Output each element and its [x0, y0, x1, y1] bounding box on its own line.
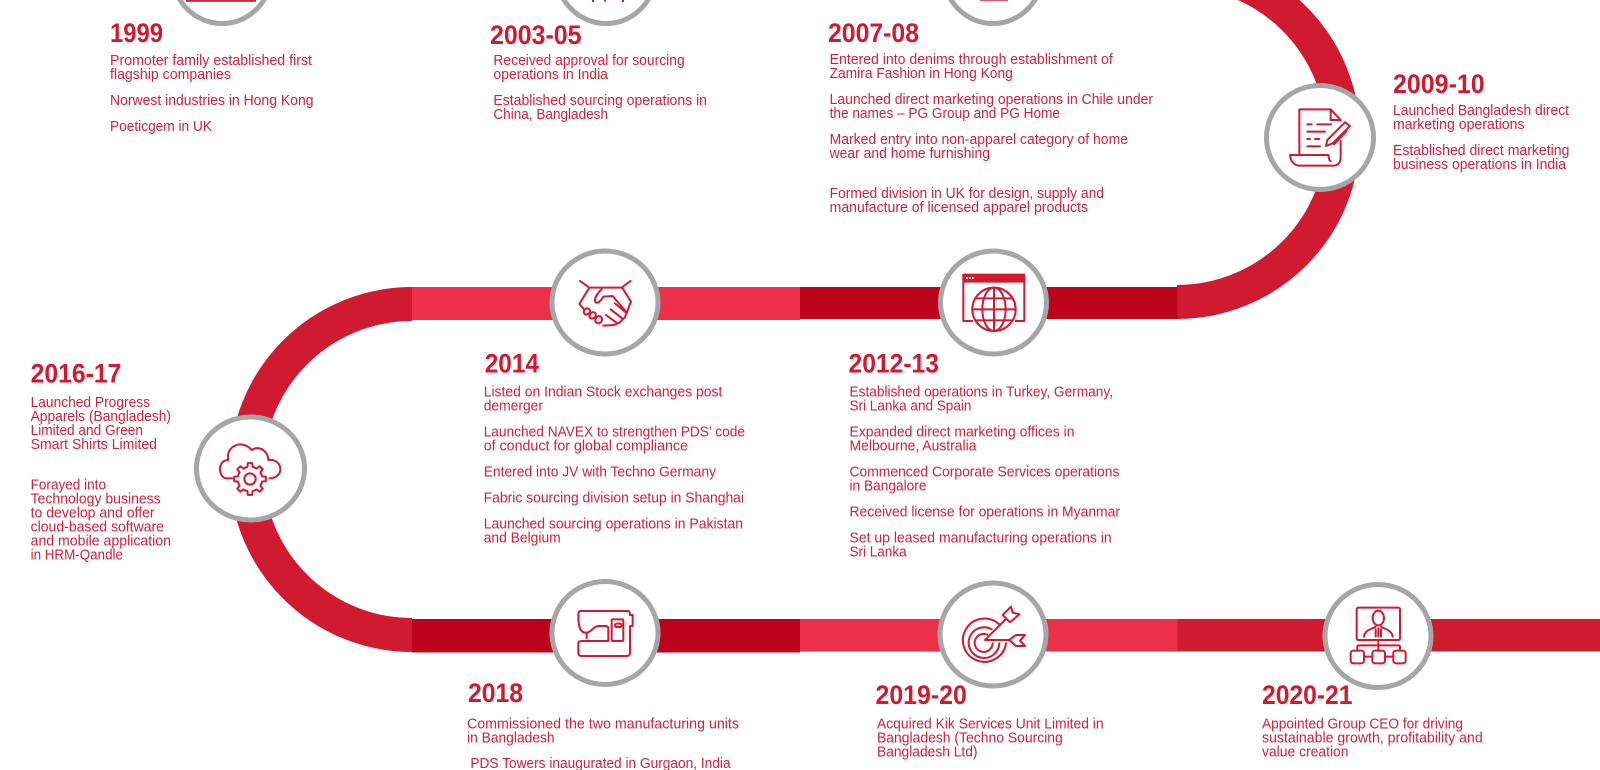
milestone: 2014: of conduct for global compliance [484, 438, 688, 455]
milestone: 2007-08: Zamira Fashion in Hong Kong [830, 65, 1013, 82]
milestone: 2014: demerger [484, 398, 543, 415]
milestone: 1999 [110, 18, 314, 135]
milestone: 1999: flagship companies [110, 66, 231, 83]
milestone: 2003-05 [490, 20, 707, 123]
milestone: 2016-17 [31, 359, 171, 563]
node: 2003-05 [556, 0, 656, 24]
milestone: 2014: Entered into JV with Techno Germany [484, 464, 716, 481]
milestone: 2003-05: Established sourcing operations in [493, 92, 707, 109]
milestone: 2003-05: China, Bangladesh [493, 106, 608, 123]
curve: top right [1177, 0, 1343, 302]
milestone: 2019-20: Bangladesh Ltd) [877, 744, 978, 761]
milestone: 2012-13: Expanded direct marketing offices in [850, 424, 1074, 441]
milestone: 2019-20: Bangladesh (Techno Sourcing [877, 730, 1063, 747]
milestone: 2016-17: Limited and Green [31, 422, 143, 439]
node: 2012-13 globe icon [940, 251, 1046, 354]
node: 2007-08 [943, 0, 1043, 24]
node: 2020-21 organisation icon [1325, 584, 1431, 688]
milestone: 2019-20: 2019-20 [876, 680, 967, 710]
milestone: 2003-05: operations in India [493, 66, 609, 83]
milestone: 2009-10 [1393, 69, 1570, 173]
milestone: 2007-08: Entered into denims through establishment of [830, 51, 1114, 68]
milestone: 2007-08: Formed division in UK for design, supply and [830, 185, 1104, 202]
milestone: 2007-08: Launched direct marketing operations in Chile under [830, 91, 1153, 108]
milestone: 2007-08: wear and home furnishing [829, 145, 990, 162]
band: 2020-21 [1178, 619, 1600, 652]
milestone: 2012-13: Sri Lanka and Spain [850, 398, 971, 415]
milestone: 2016-17: Technology business [31, 490, 161, 507]
milestone: 2007-08 [828, 18, 1153, 216]
milestone: 2016-17: Smart Shirts Limited [31, 436, 157, 453]
node: 2014 handshake icon [552, 251, 658, 354]
milestone: 2012-13: Set up leased manufacturing operations in [850, 530, 1112, 547]
band: 2019-20 [800, 619, 1178, 652]
milestone: 2012-13: 2012-13 [848, 348, 939, 378]
milestone: 2020-21: Appointed Group CEO for driving [1262, 716, 1463, 733]
milestone: 2016-17: Launched Progress [31, 394, 150, 411]
milestone: 2012-13 [848, 348, 1120, 561]
milestone: 2012-13: in Bangalore [850, 478, 926, 495]
band: 2018 [412, 619, 800, 652]
curve: left [246, 304, 412, 635]
milestone: 2012-13: Sri Lanka [850, 544, 907, 561]
milestone: 1999: Poeticgem in UK [110, 118, 212, 135]
milestone: 2007-08: the names – PG Group and PG Home [830, 105, 1060, 122]
milestone: 2012-13: Established operations in Turkey, Germany, [850, 384, 1113, 401]
milestone: 2009-10: Launched Bangladesh direct [1393, 102, 1570, 119]
milestone: 2012-13: Commenced Corporate Services operations [850, 464, 1119, 481]
milestone: 2009-10: business operations in India [1393, 156, 1567, 173]
milestone: 2014: Listed on Indian Stock exchanges post [484, 384, 723, 401]
milestone: 2007-08: 2007-08 [828, 18, 919, 48]
band: 2014 [412, 287, 800, 320]
milestone: 2014: Launched sourcing operations in Pakistan [484, 516, 743, 533]
milestone: 2018: 2018 [468, 678, 523, 708]
milestone: 2016-17: and mobile application [31, 532, 171, 549]
milestone: 2016-17: 2016-17 [31, 359, 121, 389]
milestone: 2009-10: 2009-10 [1393, 69, 1485, 99]
node: 2018 sewing machine icon [552, 582, 658, 684]
milestone: 2009-10: marketing operations [1393, 116, 1524, 133]
milestone: 2014: Launched NAVEX to strengthen PDS’ code [484, 424, 745, 441]
milestone: 2016-17: Forayed into [31, 476, 106, 493]
node: 2016-17 cloud gear icon [196, 417, 304, 520]
node: 2009-10 document icon [1266, 86, 1374, 190]
milestone: 2003-05: 2003-05 [490, 20, 582, 50]
milestone: 2016-17: Apparels (Bangladesh) [31, 408, 171, 425]
milestone: 2018 [467, 678, 739, 770]
milestone: 2014 [484, 348, 745, 547]
milestone: 2007-08: Marked entry into non-apparel category of home [830, 131, 1128, 148]
milestone: 2014: Fabric sourcing division setup in Shanghai [484, 490, 744, 507]
milestone: 1999: 1999 [110, 18, 163, 48]
band: 2012-13 [800, 287, 1178, 319]
milestone: 2020-21 [1262, 680, 1483, 761]
milestone: 2009-10: Established direct marketing [1393, 142, 1569, 159]
node: 2019-20 target icon [940, 583, 1046, 686]
milestone: 2014: and Belgium [484, 530, 561, 547]
milestone: 2016-17: to develop and offer [31, 504, 155, 521]
milestone: 2012-13: Received license for operations in Myanmar [850, 504, 1120, 521]
milestone: 2016-17: in HRM-Qandle [31, 546, 123, 563]
node: 1999 [172, 0, 272, 24]
milestone: 1999: Norwest industries in Hong Kong [110, 92, 314, 109]
milestone: 2003-05: Received approval for sourcing [493, 52, 685, 69]
milestone: 2014: 2014 [485, 348, 539, 378]
milestone: 2018: Commissioned the two manufacturing units [467, 716, 739, 733]
milestone: 2018: in Bangladesh [467, 730, 555, 747]
milestone: 2020-21: 2020-21 [1262, 680, 1352, 710]
milestone: 2020-21: sustainable growth, profitability and [1262, 730, 1483, 747]
milestone: 2020-21: value creation [1262, 744, 1348, 761]
milestone: 2007-08: manufacture of licensed apparel products [830, 199, 1088, 216]
timeline path [246, 0, 1600, 652]
milestone: 2019-20 [876, 680, 1104, 761]
milestone: 1999: Promoter family established first [110, 52, 313, 69]
milestone: 2016-17: cloud-based software [31, 518, 164, 535]
milestone: 2012-13: Melbourne, Australia [850, 438, 977, 455]
milestone: 2019-20: Acquired Kik Services Unit Limited in [877, 716, 1104, 733]
